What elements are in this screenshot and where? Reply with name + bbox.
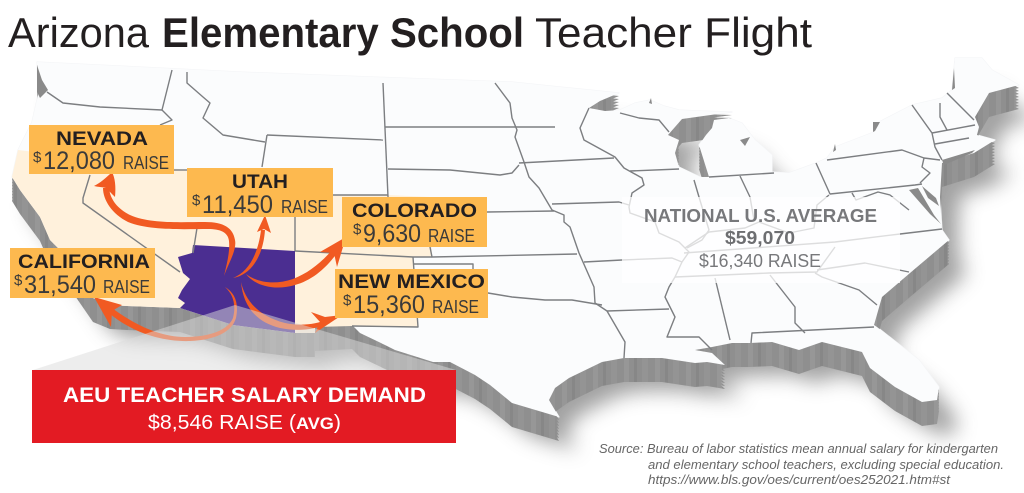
faint map edge bbox=[12, 58, 1019, 417]
California label: RAISE bbox=[103, 277, 150, 297]
arrow to California bbox=[94, 287, 237, 341]
title: Teacher Flight bbox=[535, 9, 812, 56]
New Mexico label: RAISE bbox=[432, 297, 479, 317]
source note: and elementary school teachers, excluding special education. bbox=[648, 458, 1004, 472]
source note bbox=[599, 442, 1004, 487]
Nevada label: NEVADA bbox=[56, 128, 148, 150]
national average callout bbox=[622, 197, 900, 283]
AEU salary demand box: AEU TEACHER SALARY DEMAND bbox=[63, 384, 426, 407]
callout cone from Arizona to red box bbox=[33, 305, 456, 370]
arrow to Colorado bbox=[246, 237, 346, 288]
title: Elementary School bbox=[162, 9, 524, 56]
title: Arizona bbox=[8, 9, 150, 56]
national average callout: $16,340 RAISE bbox=[699, 251, 821, 271]
map top face: United States bbox=[12, 58, 1019, 417]
AEU salary demand box bbox=[32, 370, 456, 443]
California label bbox=[10, 248, 155, 299]
source note: Source: Bureau of labor statistics mean annual salary for kindergarten bbox=[599, 442, 998, 456]
Utah label: 11,450 bbox=[202, 191, 273, 219]
Nevada label: RAISE bbox=[123, 153, 169, 173]
New Mexico label: NEW MEXICO bbox=[338, 271, 485, 293]
Utah label: UTAH bbox=[232, 171, 288, 193]
Nevada label: $ bbox=[33, 149, 42, 166]
arrow to Utah bbox=[233, 215, 271, 278]
arrow to Nevada bbox=[94, 172, 235, 276]
arrow to New Mexico bbox=[241, 282, 342, 333]
Colorado label bbox=[342, 197, 487, 248]
California label: $ bbox=[14, 272, 23, 289]
map extruded walls bbox=[12, 61, 1019, 441]
map drop shadow bbox=[30, 91, 1024, 450]
California label: CALIFORNIA bbox=[18, 251, 150, 273]
source note: https://www.bls.gov/oes/current/oes252021.htm#st bbox=[648, 473, 951, 487]
Utah label bbox=[187, 168, 333, 219]
national average callout: NATIONAL U.S. AVERAGE bbox=[644, 206, 877, 226]
Utah label: RAISE bbox=[281, 197, 328, 217]
New Mexico label: 15,360 bbox=[353, 291, 425, 319]
Colorado label: COLORADO bbox=[352, 200, 477, 222]
title bbox=[8, 9, 812, 56]
New Mexico label bbox=[335, 269, 488, 319]
AEU salary demand box: $8,546 RAISE ( AVG) bbox=[148, 412, 341, 434]
Colorado label: RAISE bbox=[428, 226, 475, 246]
New Mexico label: $ bbox=[343, 292, 352, 309]
highlighted neighbouring states: Nevada, California, Utah, Colorado, New Mexico bbox=[12, 150, 432, 333]
national average callout: $59,070 bbox=[725, 228, 795, 248]
arrows from Arizona to neighbouring states bbox=[94, 172, 346, 341]
Colorado label: 9,630 bbox=[363, 220, 421, 248]
Nevada label: 12,080 bbox=[43, 147, 115, 175]
Colorado label: $ bbox=[353, 221, 362, 238]
small inlets on the coasts and lakes bbox=[37, 65, 975, 224]
California label: 31,540 bbox=[24, 271, 96, 299]
state borders bbox=[47, 70, 975, 358]
Nevada label bbox=[29, 125, 174, 175]
Utah label: $ bbox=[192, 192, 201, 209]
state of Arizona bbox=[178, 245, 295, 333]
